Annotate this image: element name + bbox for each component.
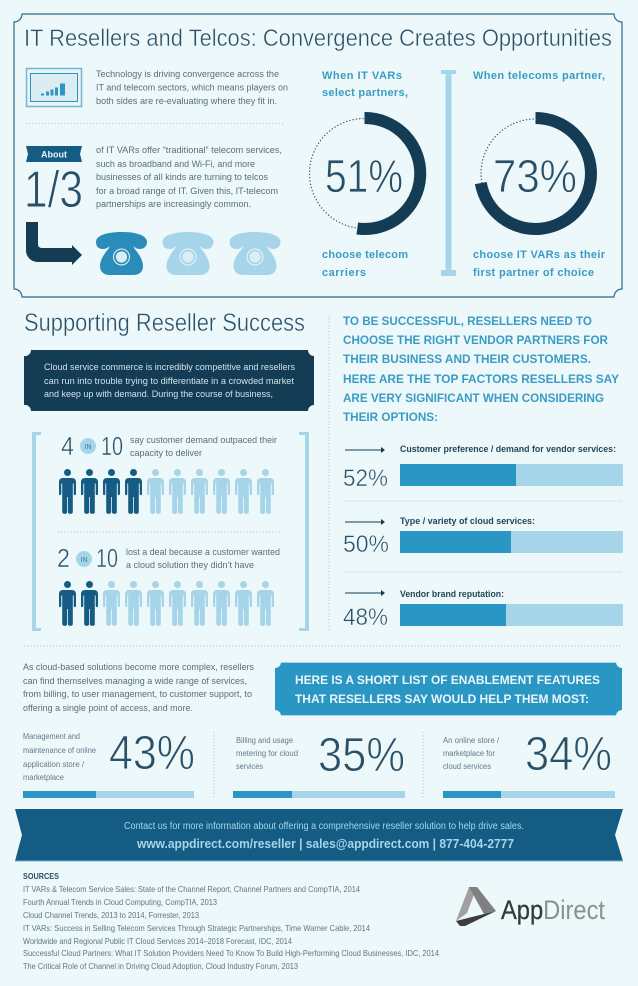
caption: telecom carriers bbox=[322, 249, 408, 279]
text: complexity: offering a single point of access, and more. bbox=[23, 703, 193, 714]
bar: cloud variety: 50% bbox=[343, 531, 389, 558]
callout bbox=[24, 350, 314, 411]
bar: brand reputation: 48% bbox=[343, 604, 388, 631]
stat: 35%: metering for cloud bbox=[236, 749, 298, 758]
caption: first partner: choose IT VARs as their bbox=[473, 249, 606, 261]
telecom text bbox=[96, 145, 282, 210]
intro text: IT and telecom sectors, which means players on bbox=[96, 82, 288, 94]
stat: 2 in 10: 2 bbox=[57, 543, 70, 573]
stat: 43%: maintenance of online bbox=[23, 746, 97, 755]
stat: 34%: An online store / bbox=[443, 736, 500, 745]
panel: supporting reseller success bbox=[24, 309, 314, 631]
panel: convergence bbox=[14, 14, 622, 297]
bar: customer preference bbox=[343, 444, 623, 492]
heading: Supporting Reseller Success bbox=[24, 309, 305, 337]
bar: brand reputation: Vendor brand reputation: bbox=[400, 589, 504, 599]
stat: 35%: Billing and usage bbox=[236, 736, 294, 745]
heading: factors: ARE VERY SIGNIFICANT WHEN CONSIDERING bbox=[343, 391, 604, 405]
stat: one third: 1/3 bbox=[24, 161, 83, 219]
sources: The Critical Role of Channel in Driving Cloud Adoption, Cloud Industry Forum, 2013 bbox=[23, 961, 298, 971]
stat: 43%: 43% bbox=[109, 727, 195, 780]
stat: 34%: marketplace for bbox=[443, 749, 495, 758]
text: complexity: can find themselves managing a wide range of services, bbox=[23, 676, 247, 687]
callout: enablement features: THAT RESELLERS SAY WOULD HELP THEM MOST: bbox=[295, 692, 589, 706]
stat: 4 in 10: 4 bbox=[61, 431, 74, 461]
telecom text: partnerships are increasingly common. bbox=[96, 199, 251, 210]
arrow: to phones bbox=[26, 222, 82, 265]
intro text bbox=[96, 69, 288, 107]
sources: Worldwide and Regional Public IT Cloud Services 2014–2018 Forecast, IDC, 2014 bbox=[23, 936, 292, 946]
IT VARs heading: When IT VARs bbox=[322, 70, 402, 82]
stat: 35%: 35% bbox=[318, 729, 405, 782]
bar: brand reputation bbox=[343, 589, 623, 631]
stat: 2 in 10: lost a deal because a customer wanted bbox=[126, 547, 280, 558]
ribbon: contact: www.appdirect.com/reseller | sales@appdirect.com | 877-404-2777 bbox=[136, 837, 514, 851]
caption: telecom carriers: choose telecom bbox=[322, 249, 408, 261]
heading: factors: HERE ARE THE TOP FACTORS RESELLERS SAY bbox=[343, 372, 619, 386]
telecom text: of IT VARs offer “traditional” telecom services, bbox=[96, 145, 282, 156]
sources: IT VARs & Telecom Service Sales: State of the Channel Report, Channel Partners and CompTIA, 2014 bbox=[23, 884, 360, 894]
stat: 43% bbox=[23, 727, 195, 798]
brackets bbox=[32, 432, 309, 631]
text: complexity: from billing, to user management, to customer support, to bbox=[23, 689, 252, 700]
chart: 51% ring: 51% bbox=[325, 150, 403, 202]
sources: Fourth Annual Trends in Cloud Computing, CompTIA, 2013 bbox=[23, 897, 217, 907]
sources: IT VARs: Success in Selling Telecom Services Through Strategic Partnerships, Time Warner Cable, 2014 bbox=[23, 923, 370, 933]
icon row: 2 of 10 people bbox=[59, 581, 274, 626]
stat: 43%: application store / bbox=[23, 760, 85, 769]
callout: and keep up with demand. During the course of business, bbox=[44, 389, 273, 400]
stat: 4 in 10: 10 bbox=[101, 431, 123, 461]
text: complexity: As cloud-based solutions become more complex, resellers bbox=[23, 662, 254, 673]
ribbon: contact: Contact us for more information about offering a comprehensive reseller solution to help drive sales. bbox=[124, 821, 524, 832]
heading: factors: THEIR BUSINESS AND THEIR CUSTOMERS. bbox=[343, 352, 591, 366]
intro text: Technology is driving convergence across the bbox=[96, 69, 279, 80]
stat: 4 in 10 bbox=[61, 431, 278, 461]
callout: can run into trouble trying to differentiate in a crowded market bbox=[44, 376, 294, 387]
bar: cloud variety: Type / variety of cloud services: bbox=[400, 516, 535, 526]
heading: factors: THEIR OPTIONS: bbox=[343, 410, 438, 424]
icon: phones bbox=[96, 232, 280, 275]
telecoms heading: When telecoms partner, bbox=[473, 70, 605, 82]
heading: factors bbox=[343, 314, 619, 424]
chart: 73% ring: 73% bbox=[493, 150, 577, 202]
telecom text: businesses of all kinds are turning to telcos bbox=[96, 172, 268, 183]
logo: AppDirect: AppDirect bbox=[501, 895, 605, 925]
callout: enablement features: HERE IS A SHORT LIST OF ENABLEMENT FEATURES bbox=[295, 673, 600, 687]
sources: SOURCES bbox=[23, 872, 60, 881]
chart: 73% ring bbox=[481, 118, 591, 229]
stat: 2 in 10: a cloud solution they didn’t have bbox=[126, 560, 254, 571]
icon row: 4 of 10 people bbox=[59, 469, 274, 514]
IT VARs heading: select partners, bbox=[322, 87, 408, 99]
banner: about bbox=[26, 146, 82, 162]
stat: 34%: cloud services bbox=[443, 762, 491, 771]
caption: first partner bbox=[473, 249, 606, 279]
callout: Cloud service commerce is incredibly competitive and resellers bbox=[44, 362, 295, 373]
intro text: both sides are re-evaluating where they fit in. bbox=[96, 96, 277, 107]
stat: 34% bbox=[443, 728, 615, 798]
stat: 4 in 10: capacity to deliver bbox=[130, 448, 203, 459]
sources bbox=[23, 872, 439, 971]
divider bbox=[441, 70, 456, 276]
bar: customer preference: Customer preference / demand for vendor services: bbox=[400, 444, 616, 454]
icon: chart on screen bbox=[26, 68, 82, 106]
bar: cloud variety bbox=[343, 516, 623, 558]
text: complexity bbox=[23, 662, 254, 714]
logo: AppDirect bbox=[456, 887, 605, 926]
stat: 34%: 34% bbox=[525, 728, 612, 781]
stat: 35%: services bbox=[236, 762, 263, 771]
banner: about: About bbox=[41, 150, 67, 160]
chart: 51% ring bbox=[310, 118, 420, 229]
telecom text: such as broadband and Wi-Fi, and more bbox=[96, 159, 255, 170]
telecom text: for a broad range of IT. Given this, IT-telecom bbox=[96, 186, 278, 197]
heading: factors: CHOOSE THE RIGHT VENDOR PARTNERS FOR bbox=[343, 333, 608, 347]
heading: factors: TO BE SUCCESSFUL, RESELLERS NEED TO bbox=[343, 314, 592, 328]
stat: 2 in 10: IN bbox=[80, 557, 88, 564]
caption: first partner: first partner of choice bbox=[473, 267, 594, 279]
stat: 2 in 10 bbox=[57, 543, 280, 573]
stat: 4 in 10: say customer demand outpaced their bbox=[130, 435, 278, 446]
sources: Successful Cloud Partners: What IT Solution Providers Need To Know To Build High-Performing Cloud Businesses, IDC, 2014 bbox=[23, 948, 439, 958]
stat: 43%: Management and bbox=[23, 732, 80, 741]
sources: Cloud Channel Trends, 2013 to 2014, Forrester, 2013 bbox=[23, 910, 199, 920]
IT VARs heading bbox=[322, 70, 408, 99]
callout: enablement features bbox=[275, 662, 622, 716]
stat: 4 in 10: IN bbox=[84, 444, 92, 451]
stat: 43%: marketplace bbox=[23, 773, 65, 782]
stat: 35% bbox=[233, 729, 405, 798]
bar: customer preference: 52% bbox=[343, 465, 388, 492]
caption: telecom carriers: carriers bbox=[322, 267, 366, 279]
ribbon: contact bbox=[15, 809, 623, 861]
stat: 2 in 10: 10 bbox=[96, 543, 118, 573]
panel: vendor factors bbox=[343, 314, 623, 631]
